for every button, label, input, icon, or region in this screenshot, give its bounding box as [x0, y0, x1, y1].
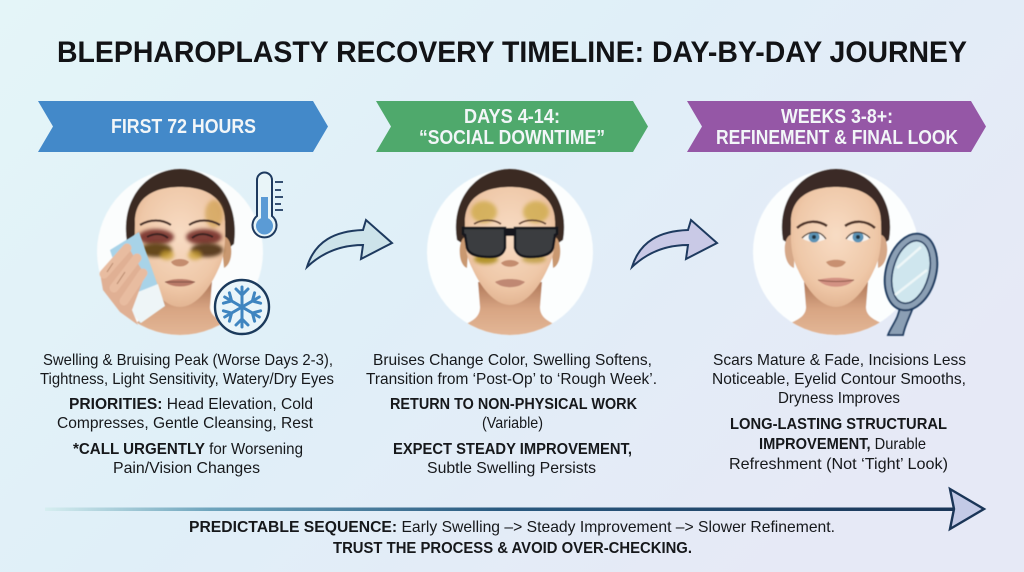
text block: days 4-14 — [366, 352, 657, 477]
icon: cold pack and hand — [100, 232, 165, 325]
banner: days 4-14 — [376, 101, 648, 152]
title: BLEPHAROPLASTY RECOVERY TIMELINE: DAY-BY-DAY JOURNEY — [57, 36, 967, 69]
timeline arrow — [45, 489, 984, 529]
summary text: TRUST THE PROCESS & AVOID OVER-CHECKING. — [333, 540, 692, 557]
icon: hand mirror — [877, 228, 945, 335]
fading yellow bruises — [471, 201, 549, 264]
text block: first 72 hours: Tightness, Light Sensitivity, Watery/Dry Eyes — [40, 371, 334, 388]
text block: days 4-14: Transition from ‘Post-Op’ to ‘Rough Week’. — [366, 371, 657, 388]
portrait: bruised face with cold compress — [97, 169, 263, 342]
arrow: second to third stage — [632, 220, 717, 267]
text block: weeks 3-8+: Dryness Improves — [778, 390, 900, 407]
text block: first 72 hours: Compresses, Gentle Cleansing, Rest — [57, 415, 314, 432]
arrow: first to second stage — [307, 220, 392, 267]
text block: first 72 hours: Pain/Vision Changes — [113, 460, 260, 477]
forehead and temple bruising — [205, 200, 223, 228]
summary text: PREDICTABLE SEQUENCE: Early Swelling –> Steady Improvement –> Slower Refinement. — [189, 519, 835, 536]
text block: days 4-14: EXPECT STEADY IMPROVEMENT, — [393, 441, 632, 458]
text block: days 4-14: (Variable) — [482, 415, 543, 432]
text block: weeks 3-8+: Refreshment (Not ‘Tight’ Look) — [729, 456, 948, 473]
text block: days 4-14: RETURN TO NON-PHYSICAL WORK — [390, 396, 637, 413]
summary text — [189, 519, 835, 557]
text block: weeks 3-8+: Noticeable, Eyelid Contour Smooths, — [712, 371, 966, 388]
bruises around eyes — [138, 229, 223, 260]
banner: weeks 3-8+ — [687, 101, 986, 152]
icon: thermometer — [253, 173, 283, 237]
text block: first 72 hours — [40, 352, 334, 477]
sunglasses — [463, 228, 557, 257]
banner: days 4-14: “SOCIAL DOWNTIME” — [419, 127, 605, 149]
text block: first 72 hours: Swelling & Bruising Peak (Worse Days 2-3), — [43, 352, 333, 369]
text block: first 72 hours: *CALL URGENTLY for Worsening — [73, 441, 303, 458]
banner: days 4-14: DAYS 4-14: — [464, 106, 560, 128]
text block: days 4-14: Bruises Change Color, Swelling Softens, — [373, 352, 652, 369]
eyes — [802, 232, 870, 242]
portrait: refreshed final look — [753, 169, 919, 342]
text block: days 4-14: Subtle Swelling Persists — [427, 460, 596, 477]
banner: weeks 3-8+: WEEKS 3-8+: — [781, 106, 893, 128]
text block: weeks 3-8+: Scars Mature & Fade, Incisions Less — [713, 352, 966, 369]
banner: first 72 hours — [38, 101, 328, 152]
text block: first 72 hours: PRIORITIES: Head Elevation, Cold — [69, 396, 313, 413]
text block: weeks 3-8+: IMPROVEMENT, Durable — [759, 436, 926, 453]
icon: snowflake badge — [215, 280, 269, 334]
eyebrows, eyes, nose and mouth — [140, 220, 220, 286]
text block: weeks 3-8+ — [712, 352, 966, 473]
eyebrows — [797, 222, 875, 228]
portrait: face with sunglasses — [427, 169, 593, 342]
banner: weeks 3-8+: REFINEMENT & FINAL LOOK — [716, 127, 958, 149]
text block: weeks 3-8+: LONG-LASTING STRUCTURAL — [730, 416, 947, 433]
banner: first 72 hours: FIRST 72 HOURS — [111, 116, 256, 138]
lips — [495, 279, 525, 287]
lips — [818, 278, 854, 287]
